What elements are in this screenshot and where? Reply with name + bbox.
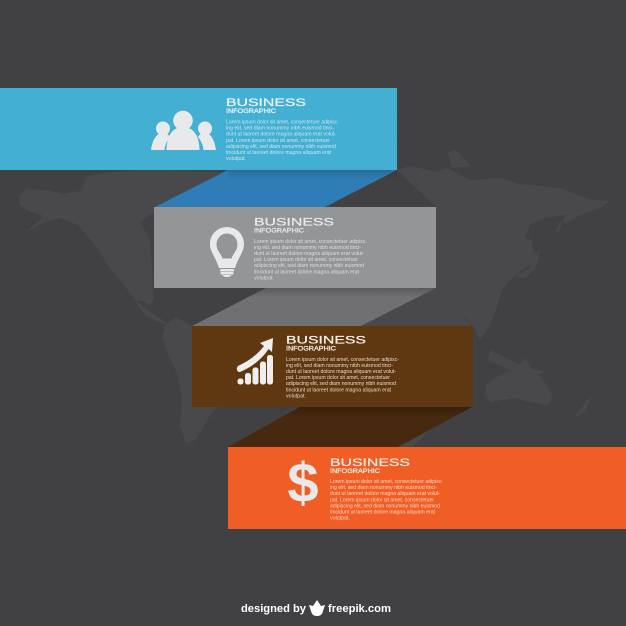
map: south america [162,317,228,443]
heading: brown panel: BUSINESS [286,334,366,346]
text block: grey panel: pat. Lorem ipsum dolor sit amet, consectetuer [254,257,358,263]
icon: people [151,111,216,150]
text block: blue panel [226,120,339,162]
text block: orange panel: Lorem ipsum dolor sit amet, consectetuer adipisc- [330,479,443,485]
text block: orange panel [330,479,443,522]
text block: grey panel: adipiscing elit, sed diam nonummy nibh euismod [254,263,364,269]
panel: brown [192,326,473,407]
text block: brown panel: ing elit, sed diam nonummy nibh euismod tinci- [286,363,393,369]
text block: blue panel: pat. Lorem ipsum dolor sit amet, consectetuer [226,138,330,144]
map: se asia islands [488,350,545,376]
ribbon: grey fold [192,288,436,326]
heading: grey panel: BUSINESS [254,216,334,228]
text block: orange panel: tincidunt ut laoreet dolore magna aliquam erat [330,510,436,516]
ribbon: brown fold [228,407,472,447]
map: eurasia [397,166,610,340]
heading: orange panel: INFOGRAPHIC [330,469,381,475]
map: greenland / north [448,150,470,168]
text block: grey panel: tincidunt ut laoreet dolore magna aliquam erat [254,269,360,275]
panel: orange [228,447,626,529]
text block: orange panel: volutpat. [330,516,350,522]
text block: blue panel: dunt ut laoreet dolore magna aliquam erat volut- [226,132,336,138]
heading: brown panel: INFOGRAPHIC [286,346,337,352]
icon: light bulb [210,227,244,277]
text block: grey panel [254,239,367,281]
text block: orange panel: ing elit, sed diam nonummy nibh euismod tinci- [330,485,437,491]
icon: freepik crown [309,600,325,616]
text block: blue panel: Lorem ipsum dolor sit amet, consectetuer adipisc- [226,120,339,126]
heading: blue panel [226,97,306,115]
icon: dollar sign: $ [287,451,319,514]
footer credit: designed by [241,603,307,615]
text block: blue panel: ing elit, sed diam nonummy nibh euismod tinci- [226,126,334,132]
text block: brown panel: Lorem ipsum dolor sit amet, consectetuer adipisc- [286,357,399,363]
map: japan [515,250,540,278]
text block: orange panel: pat. Lorem ipsum dolor sit amet, consectetuer [330,497,434,503]
heading: orange panel: BUSINESS [330,457,410,469]
text block: grey panel: Lorem ipsum dolor sit amet, consectetuer adipisc- [254,239,367,245]
map: africa [270,288,470,450]
text block: brown panel: volutpat. [286,393,306,399]
text block: blue panel: volutpat. [226,156,246,162]
footer credit [241,600,391,616]
text block: brown panel [286,357,399,399]
heading: brown panel [286,334,366,352]
footer credit: freepik.com [328,603,391,615]
text block: grey panel: dunt ut laoreet dolore magna aliquam erat volut- [254,251,364,257]
text block: grey panel: volutpat. [254,275,274,281]
panel: blue [0,88,397,170]
icon: growth chart [237,338,273,384]
text block: brown panel: pat. Lorem ipsum dolor sit amet, consectetuer [286,375,390,381]
heading: grey panel: INFOGRAPHIC [254,228,305,234]
world map [19,150,610,450]
text block: blue panel: adipiscing elit, sed diam nonummy nibh euismod [226,144,336,150]
map: north america [19,170,228,326]
text block: orange panel: adipiscing elit, sed diam nonummy nibh euismod [330,503,440,509]
map: new zealand [574,395,592,417]
text block: grey panel: ing elit, sed diam nonummy nibh euismod tinci- [254,245,361,251]
heading: blue panel: INFOGRAPHIC [226,109,277,115]
text block: blue panel: tincidunt ut laoreet dolore magna aliquam erat [226,150,332,156]
heading: blue panel: BUSINESS [226,97,306,109]
panel: grey [154,207,436,288]
text block: brown panel: dunt ut laoreet dolore magna aliquam erat volut- [286,369,396,375]
text block: brown panel: tincidunt ut laoreet dolore magna aliquam erat [286,387,392,393]
heading: orange panel [330,457,410,475]
map: australia [485,358,553,405]
ribbon: blue fold [155,170,397,207]
text block: orange panel: dunt ut laoreet dolore magna aliquam erat volut- [330,491,440,497]
heading: grey panel [254,216,334,234]
text block: brown panel: adipiscing elit, sed diam nonummy nibh euismod [286,381,396,387]
